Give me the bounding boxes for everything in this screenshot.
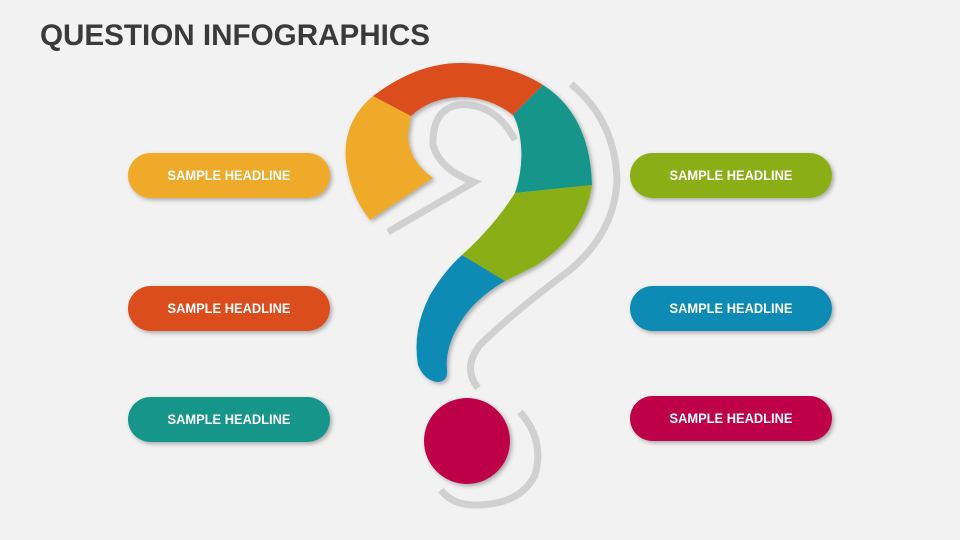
pill right 2: SAMPLE HEADLINE xyxy=(670,300,792,316)
pill left 1: SAMPLE HEADLINE xyxy=(168,167,290,183)
pill right 1: SAMPLE HEADLINE xyxy=(670,167,792,183)
pill right 3: SAMPLE HEADLINE xyxy=(670,410,792,426)
segment teal xyxy=(513,85,592,193)
title: QUESTION INFOGRAPHICS xyxy=(40,19,430,52)
pill left 2: SAMPLE HEADLINE xyxy=(168,300,290,316)
pill left 3: SAMPLE HEADLINE xyxy=(168,411,290,427)
question mark shadow strokes xyxy=(388,84,617,505)
segment green xyxy=(462,185,592,281)
segment yellow xyxy=(346,96,433,220)
pill left 3 xyxy=(128,397,330,442)
pill right 1 xyxy=(630,153,832,198)
segment orange xyxy=(373,63,543,116)
question mark xyxy=(346,63,592,484)
segment blue xyxy=(416,255,505,382)
pill right 2 xyxy=(630,286,832,331)
dot xyxy=(424,398,510,484)
pill right 3 xyxy=(630,396,832,441)
pill left 1 xyxy=(128,153,330,198)
pill left 2 xyxy=(128,286,330,331)
